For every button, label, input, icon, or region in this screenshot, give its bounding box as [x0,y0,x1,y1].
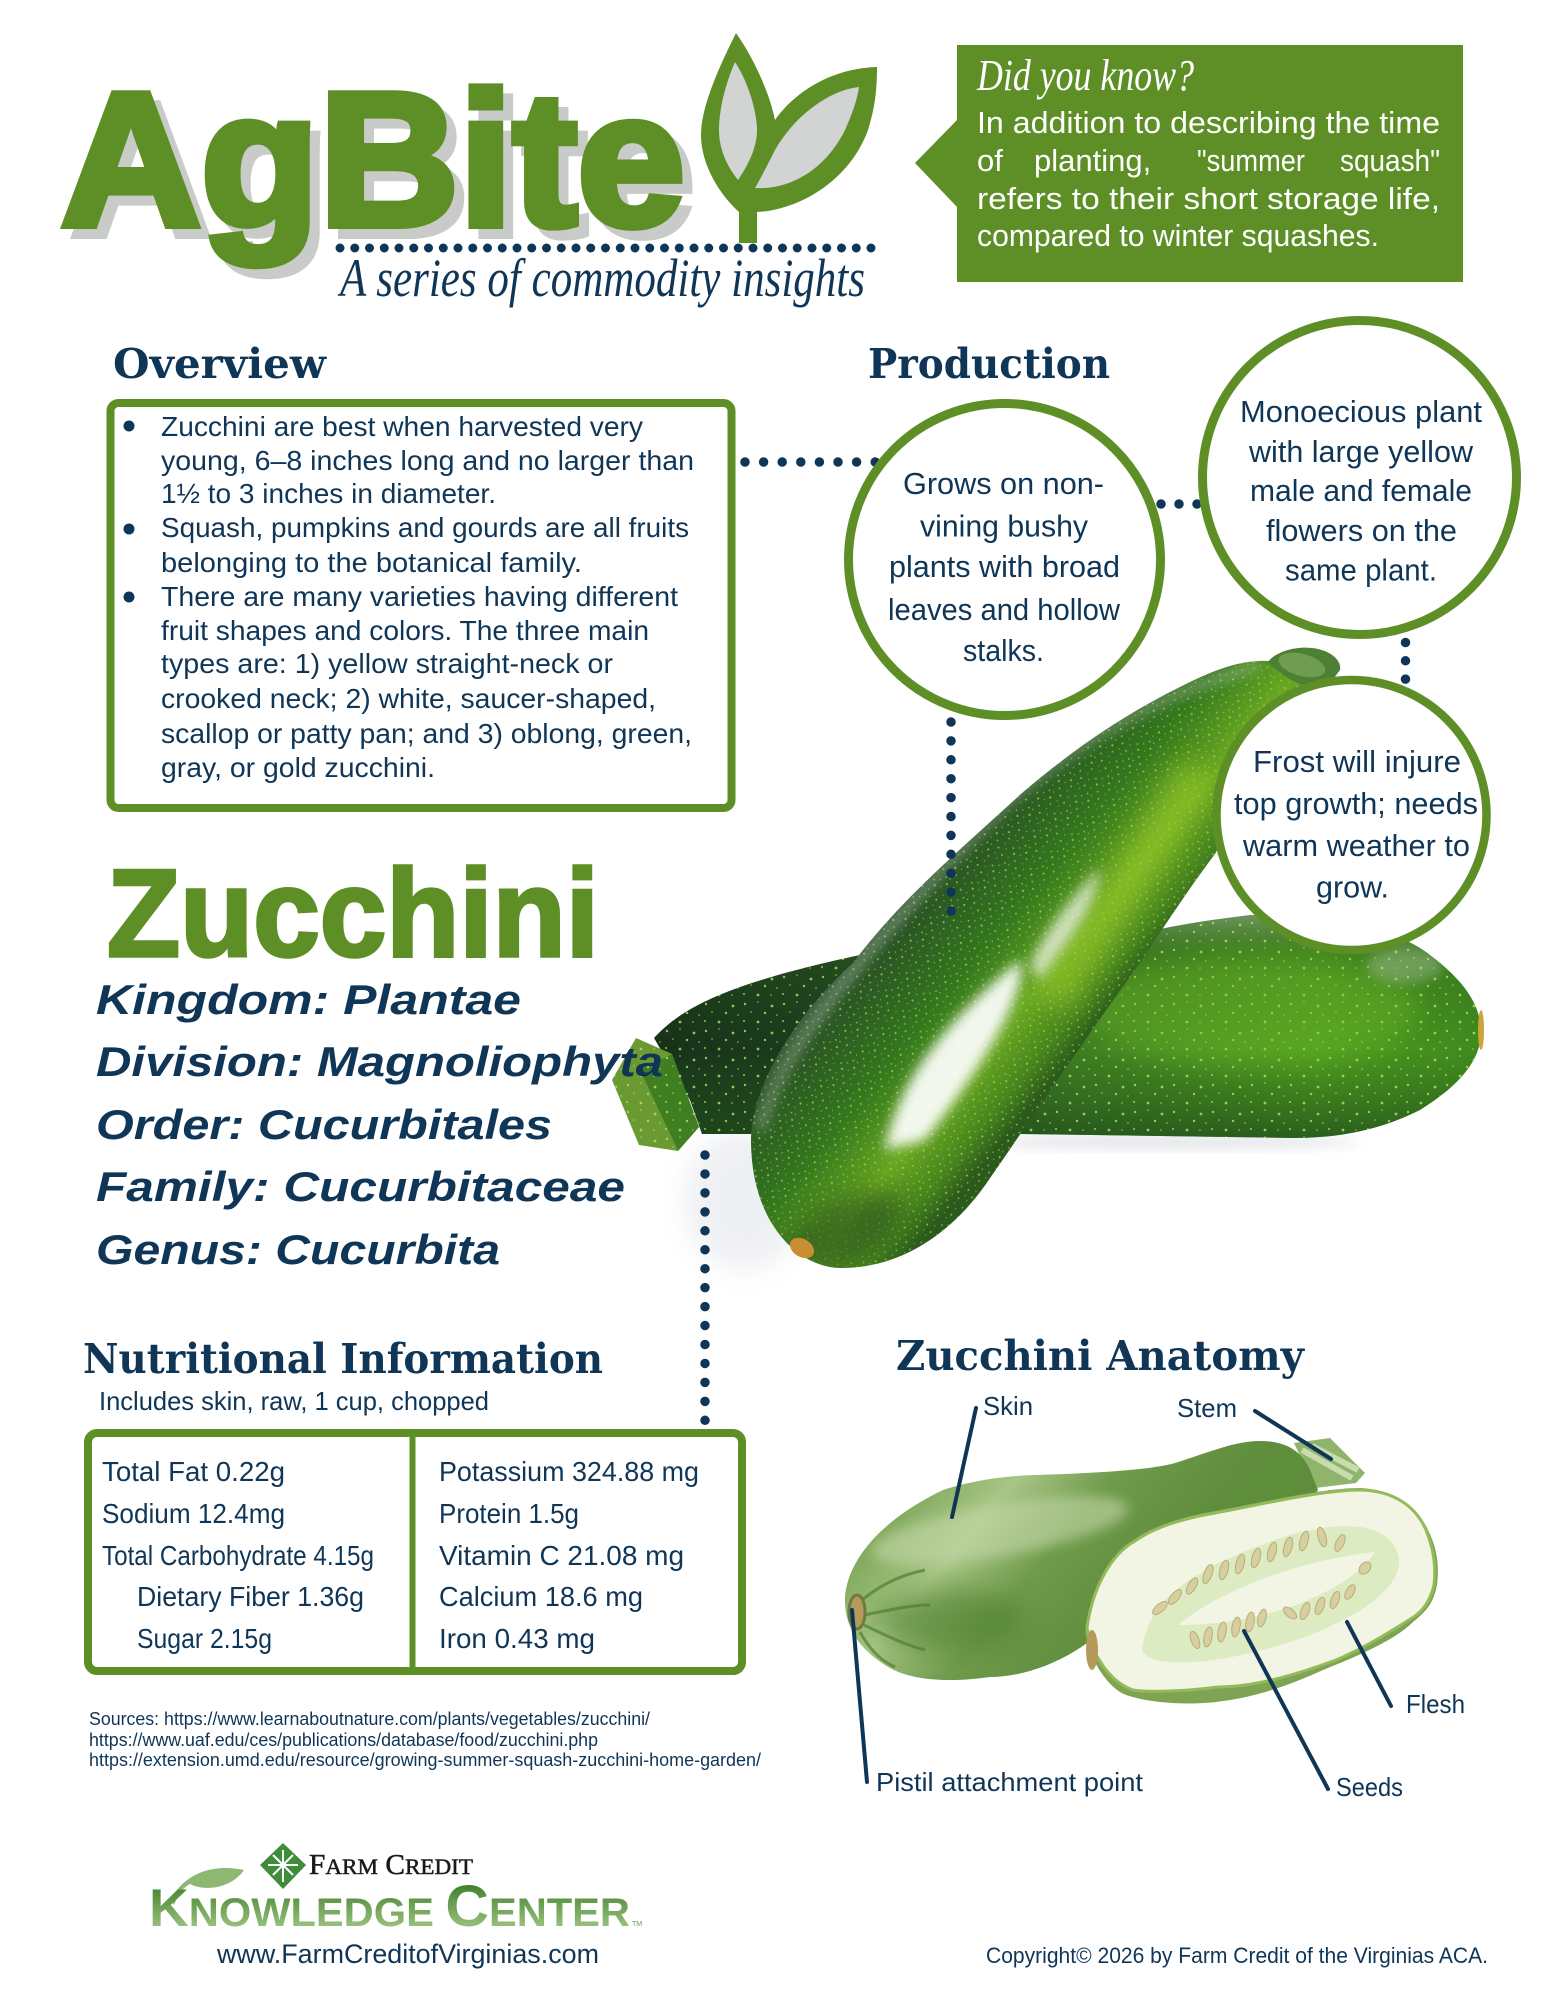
panel: overview: belonging to the botanical family. [161,547,582,578]
callout: did you know: of [977,143,1003,178]
circle: plant habit: leaves and hollow [888,592,1121,627]
anatomy labels: Stem [1177,1393,1237,1423]
heading: Zucchini: Zucchini [107,845,599,983]
heading: Zucchini Anatomy: Zucchini Anatomy [896,1332,1305,1380]
panel: overview: There are many varieties having different [161,581,678,612]
anatomy labels: Flesh [1406,1689,1465,1719]
panel: nutrition table: Total Carbohydrate 4.15g [102,1540,374,1571]
panel: overview: Zucchini are best when harvested very [161,411,643,442]
heading: Overview: Overview [113,340,328,388]
copyright: Copyright© 2026 by Farm Credit of the Virginias ACA. [986,1943,1488,1968]
title: AgBite: AgBite [61,54,685,266]
circle: monoecious: male and female [1250,473,1472,508]
taxonomy list: Kingdom: Plantae [96,976,521,1023]
circle: plant habit [848,404,1160,716]
logo: Farm Credit Knowledge Center: KNOWLEDGE CENTER [149,1874,630,1939]
anatomy labels: Skin [983,1391,1033,1421]
callout: did you know: Did you know? [976,51,1194,100]
taxonomy list [96,976,663,1273]
panel: overview: 1½ to 3 inches in diameter. [161,478,496,509]
circle: plant habit: vining bushy [920,508,1088,544]
panel: nutrition table: Calcium 18.6 mg [439,1581,643,1612]
panel: nutrition table [88,1433,742,1671]
leader lines [852,1408,1391,1789]
panel: nutrition table: Vitamin C 21.08 mg [439,1540,684,1571]
circle: frost: warm weather to [1242,828,1470,863]
logo: Farm Credit Knowledge Center: FARM CREDIT [309,1850,474,1881]
anatomy labels: Pistil attachment point [876,1767,1144,1797]
panel: overview [110,403,732,808]
note: serving: Includes skin, raw, 1 cup, chopped [99,1386,489,1416]
text: sources: https://extension.umd.edu/resource/growing-summer-squash-zucchini-home-garden/ [89,1750,761,1770]
anatomy labels: Seeds [1336,1772,1403,1802]
connector dots [705,462,1406,1421]
circle: monoecious: flowers on the [1266,513,1457,548]
panel: overview: types are: 1) yellow straight-neck or [161,648,613,679]
anatomy labels [876,1391,1465,1802]
panel: nutrition table: Iron 0.43 mg [439,1623,595,1654]
title: AgBite: AgBite [71,64,695,276]
callout: did you know: compared to winter squashes. [977,218,1379,253]
taxonomy list: Genus: Cucurbita [96,1226,500,1273]
taxonomy list: Order: Cucurbitales [96,1101,552,1148]
circle: frost [1216,680,1486,950]
circle: monoecious: Monoecious plant [1240,394,1482,429]
text: sources: https://www.uaf.edu/ces/publications/database/food/zucchini.php [89,1730,598,1750]
taxonomy list: Division: Magnoliophyta [96,1038,663,1085]
panel: overview: Squash, pumpkins and gourds are all fruits [161,512,689,543]
panel: overview: scallop or patty pan; and 3) oblong, green, [161,718,692,749]
heading: Production: Production [868,340,1110,388]
website: www.FarmCreditofVirginias.com [216,1939,599,1969]
logo: Farm Credit Knowledge Center: TM [632,1921,642,1928]
circle: monoecious: same plant. [1285,552,1437,588]
circle: monoecious [1202,320,1516,634]
icon: leaf sprout [701,33,877,243]
circle: frost: Frost will injure [1253,744,1461,779]
panel: overview: gray, or gold zucchini. [161,752,435,783]
panel: nutrition table: Total Fat 0.22g [102,1456,285,1487]
text: sources: Sources: https://www.learnaboutnature.com/plants/vegetables/zucchini/ [89,1709,650,1729]
tagline: A series of commodity insights [338,248,865,308]
callout: did you know: In addition to describing the time [977,105,1440,140]
taxonomy list: Family: Cucurbitaceae [96,1163,625,1210]
callout: did you know [915,45,1463,282]
callout: did you know: "summer [1197,143,1305,178]
illustration: zucchini anatomy [845,1438,1438,1703]
heading: Nutritional Information: Nutritional Information [83,1335,603,1383]
circle: frost: grow. [1316,870,1389,904]
callout: did you know: refers to their short storage life, [977,181,1440,216]
circle: plant habit: Grows on non- [903,466,1104,501]
circle: plant habit: plants with broad [889,549,1120,584]
panel: overview: fruit shapes and colors. The three main [161,615,649,646]
panel: overview: crooked neck; 2) white, saucer-shaped, [161,683,656,714]
panel: nutrition table: Dietary Fiber 1.36g [137,1581,364,1612]
panel: overview: young, 6–8 inches long and no larger than [161,445,694,476]
photo: two whole zucchini [612,648,1490,1298]
circle: monoecious: with large yellow [1248,434,1474,469]
circle: frost: top growth; needs [1234,786,1478,821]
logo: Farm Credit Knowledge Center [149,1843,642,1939]
circle: plant habit: stalks. [963,633,1044,668]
panel: nutrition table: Sugar 2.15g [137,1623,272,1654]
callout: did you know: planting, [1034,143,1151,178]
dotted rule under logo [340,244,875,252]
callout: did you know: squash" [1340,143,1440,178]
text: sources [89,1709,761,1770]
panel: nutrition table: Sodium 12.4mg [102,1498,285,1529]
panel: nutrition table: Protein 1.5g [439,1498,579,1529]
panel: nutrition table: Potassium 324.88 mg [439,1456,699,1487]
